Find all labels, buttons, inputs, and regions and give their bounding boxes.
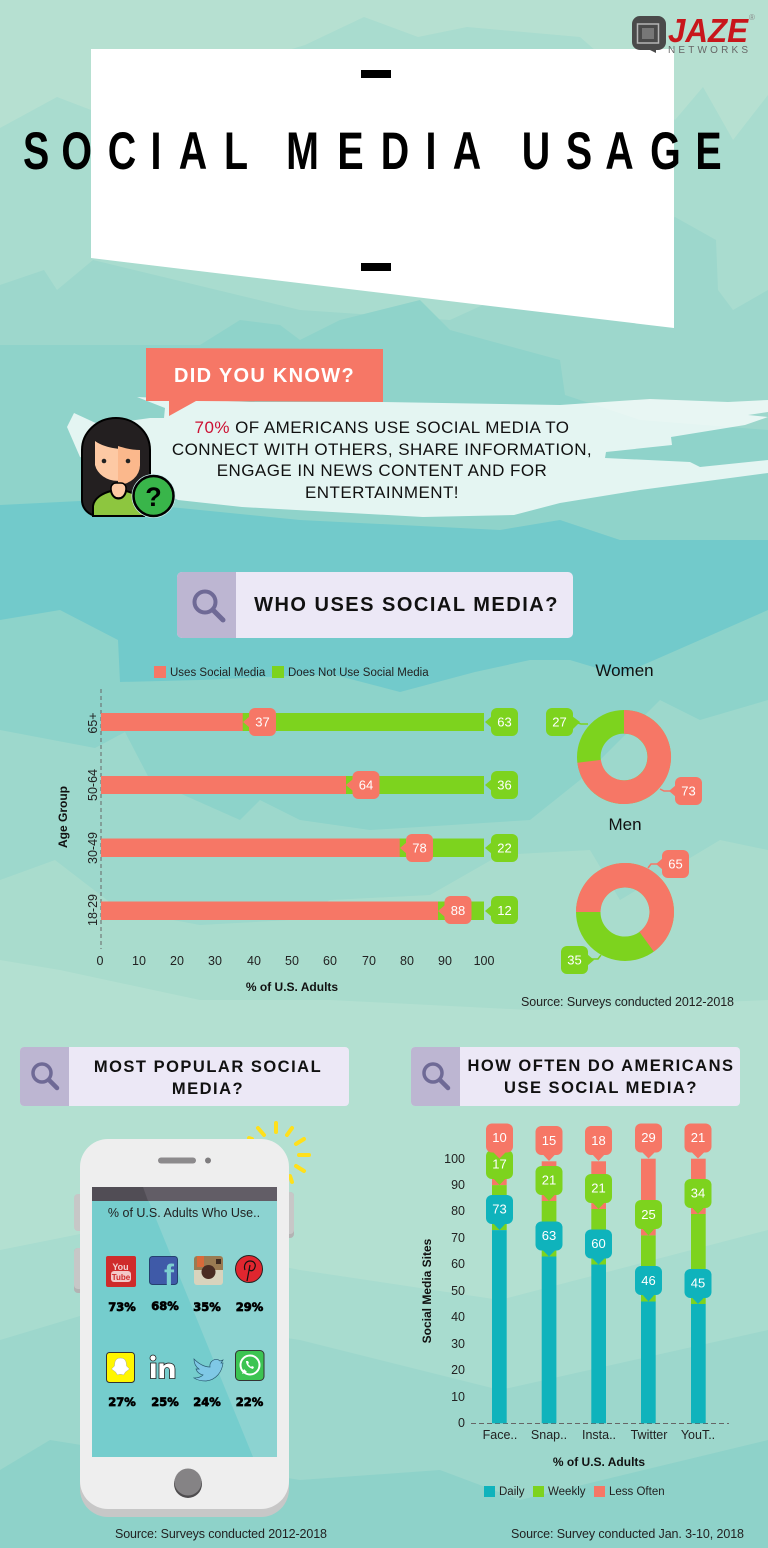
donut: men — [561, 815, 689, 974]
brush stroke — [67, 397, 768, 517]
donut: men: 35 — [567, 952, 582, 968]
axis labels: age: 50-64 — [86, 769, 100, 801]
percentages: first row: 29% — [236, 1300, 264, 1314]
column: Snapchat — [531, 1126, 567, 1442]
heading: most popular social media: MOST POPULAR SOCIAL — [94, 1058, 322, 1076]
icon: girl with question mark — [82, 418, 176, 518]
axis labels: frequency: 10 — [451, 1390, 465, 1404]
column: Facebook: Face.. — [483, 1428, 517, 1442]
axis labels: frequency: 20 — [451, 1363, 465, 1377]
axis labels: age: 18-29 — [86, 894, 100, 926]
axis labels: frequency: 50 — [451, 1284, 465, 1298]
source: age and gender: Source: Surveys conducted 2012-2018 — [521, 995, 734, 1009]
bar: 30-49: 78 — [412, 840, 427, 856]
column: Twitter: 46 — [641, 1273, 656, 1288]
legend: frequency: Daily — [499, 1486, 525, 1498]
icon: youtube — [106, 1256, 136, 1287]
axis labels: percent: 80 — [400, 954, 414, 968]
column: YouTube: YouT.. — [681, 1428, 715, 1442]
icon: facebook — [150, 1256, 178, 1292]
column: Instagram: 21 — [591, 1180, 606, 1196]
column: Snapchat: 15 — [542, 1133, 556, 1148]
axis title: social media sites: Social Media Sites — [420, 1238, 434, 1343]
heading: who uses social media — [177, 572, 573, 638]
axis labels: age: 65+ — [86, 712, 100, 734]
text block: 70 percent fact: ENTERTAINMENT! — [305, 483, 459, 502]
legend: age chart: Uses Social Media — [170, 667, 266, 679]
phone — [74, 1139, 294, 1517]
source: phone: Source: Surveys conducted 2012-2018 — [115, 1527, 327, 1541]
heading: who uses social media: WHO USES SOCIAL MEDIA? — [254, 594, 559, 616]
column: YouTube: 45 — [691, 1276, 705, 1290]
axis labels: percent: 20 — [170, 954, 184, 968]
percentages: second row — [108, 1395, 264, 1409]
axis labels: frequency: 40 — [451, 1310, 465, 1324]
bar chart: age group — [56, 689, 518, 994]
icon: youtube: Tube — [112, 1273, 131, 1282]
percentages: second row: 24% — [193, 1395, 221, 1409]
icon: sun rays — [249, 1123, 309, 1182]
axis labels: age: 30-49 — [86, 832, 100, 864]
axis labels: percent: 50 — [285, 954, 299, 968]
icon: facebook: f — [164, 1259, 175, 1292]
icon: snapchat — [106, 1352, 134, 1382]
title dash top — [361, 70, 391, 78]
text: phone caption: % of U.S. Adults Who Use.. — [108, 1206, 260, 1220]
bar: 18-29: 12 — [497, 903, 512, 918]
column: Snapchat: Snap.. — [531, 1428, 567, 1442]
bar: 50-64: 36 — [497, 778, 512, 792]
axis title: age group: Age Group — [56, 786, 70, 848]
bar: 30-49: 22 — [497, 840, 512, 856]
title panel — [91, 49, 674, 328]
axis labels: frequency: 90 — [451, 1178, 465, 1192]
axis labels: percent: 10 — [132, 954, 146, 968]
heading: how often: HOW OFTEN DO AMERICANS — [467, 1057, 735, 1075]
column: Instagram — [582, 1126, 616, 1442]
column: Twitter — [631, 1124, 667, 1442]
heading: most popular social media — [20, 1047, 349, 1106]
icon: whatsapp — [236, 1350, 264, 1380]
column: Facebook: 73 — [492, 1202, 507, 1216]
column: YouTube: 21 — [691, 1130, 705, 1145]
heading: most popular social media: MEDIA? — [172, 1080, 244, 1098]
icon: girl with question mark: ? — [145, 482, 162, 512]
column: Twitter: Twitter — [631, 1428, 667, 1442]
legend: frequency — [484, 1486, 665, 1498]
axis title: percent of adults: % of U.S. Adults — [553, 1455, 645, 1469]
column: YouTube: 34 — [691, 1186, 705, 1200]
text block: 70 percent fact: ENGAGE IN NEWS CONTENT AND FOR — [217, 461, 547, 480]
axis labels: frequency: 80 — [451, 1204, 465, 1218]
column: YouTube — [681, 1124, 715, 1442]
axis labels: frequency: 100 — [444, 1152, 465, 1166]
bar: 30-49 — [101, 834, 518, 862]
column: Instagram: Insta.. — [582, 1428, 616, 1442]
donut: women — [546, 661, 702, 805]
percentages: second row: 25% — [151, 1395, 179, 1409]
callout: did you know: DID YOU KNOW? — [174, 365, 355, 387]
icon: twitter — [194, 1359, 223, 1381]
bar: 18-29 — [101, 896, 518, 924]
text block: 70 percent fact — [172, 418, 592, 502]
axis labels: frequency: 30 — [451, 1337, 465, 1351]
percentages: first row: 73% — [108, 1300, 136, 1314]
axis labels: percent: 90 — [438, 954, 452, 968]
column: Snapchat: 63 — [542, 1228, 556, 1243]
column: Twitter: 25 — [641, 1207, 656, 1222]
bar: 65+: 37 — [255, 714, 270, 730]
title: MEDIA — [286, 121, 481, 180]
percentages: first row: 35% — [193, 1300, 221, 1314]
bar: 50-64 — [101, 771, 518, 799]
column: Instagram: 60 — [591, 1236, 606, 1251]
percentages: first row: 68% — [151, 1299, 179, 1313]
axis labels: percent: 0 — [97, 954, 104, 968]
axis labels: frequency: 0 — [458, 1416, 465, 1430]
column: Facebook: 17 — [492, 1156, 507, 1172]
legend: frequency: Weekly — [548, 1486, 586, 1498]
column: Facebook — [483, 1124, 517, 1442]
axis labels: percent: 70 — [362, 954, 376, 968]
donut: men: 65 — [668, 856, 683, 872]
column: Facebook: 10 — [492, 1130, 507, 1145]
source: frequency: Source: Survey conducted Jan. 3-10, 2018 — [511, 1527, 744, 1541]
icon: instagram — [194, 1256, 223, 1285]
column: Snapchat: 21 — [542, 1172, 556, 1188]
axis labels: percent: 60 — [323, 954, 337, 968]
heading: how often — [411, 1047, 740, 1106]
logo: Jaze Networks — [632, 12, 755, 56]
title: USAGE — [522, 121, 722, 180]
legend: frequency: Less Often — [609, 1486, 665, 1498]
axis labels: percent: 30 — [208, 954, 222, 968]
title — [23, 121, 722, 180]
percentages: second row: 27% — [108, 1395, 136, 1409]
logo: Jaze Networks: JAZE — [668, 12, 749, 49]
bar: 50-64: 64 — [359, 778, 373, 792]
axis labels: age — [86, 712, 100, 926]
donut: men: Men — [608, 815, 642, 834]
callout: did you know — [146, 348, 383, 416]
heading: how often: USE SOCIAL MEDIA? — [504, 1079, 698, 1097]
title dash bottom — [361, 263, 391, 271]
donut: women: Women — [595, 661, 654, 680]
text block: 70 percent fact: CONNECT WITH OTHERS, SHARE INFORMATION, — [172, 440, 592, 459]
percentages: second row: 22% — [236, 1395, 264, 1409]
axis labels: percent — [97, 954, 494, 968]
bar: 65+: 63 — [497, 714, 512, 730]
text block: 70 percent fact: 70% OF AMERICANS USE SOCIAL MEDIA TO — [195, 418, 569, 437]
axis labels: frequency: 70 — [451, 1231, 465, 1245]
axis labels: percent: 40 — [247, 954, 261, 968]
logo: Jaze Networks: NETWORKS — [668, 45, 748, 56]
donut: women: 27 — [552, 714, 567, 730]
legend: age chart: Does Not Use Social Media — [288, 667, 429, 679]
logo: Jaze Networks: ® — [749, 13, 755, 22]
column: Twitter: 29 — [641, 1130, 656, 1145]
bar: 18-29: 88 — [451, 903, 465, 918]
icon: youtube: You — [112, 1262, 129, 1272]
title: SOCIAL — [23, 121, 248, 180]
icon: pinterest — [236, 1256, 262, 1282]
legend: age chart — [154, 666, 429, 679]
axis labels: frequency: 60 — [451, 1257, 465, 1271]
axis labels: frequency — [444, 1152, 465, 1430]
axis title: percent of adults: % of U.S. Adults — [246, 980, 338, 994]
bar: 65+ — [101, 708, 518, 736]
percentages: first row — [108, 1299, 264, 1314]
stacked bar chart: frequency of use — [420, 1124, 729, 1469]
donut: women: 73 — [681, 784, 696, 798]
icon: linkedin — [150, 1355, 175, 1378]
axis labels: percent: 100 — [474, 954, 494, 968]
column: Instagram: 18 — [591, 1133, 606, 1148]
